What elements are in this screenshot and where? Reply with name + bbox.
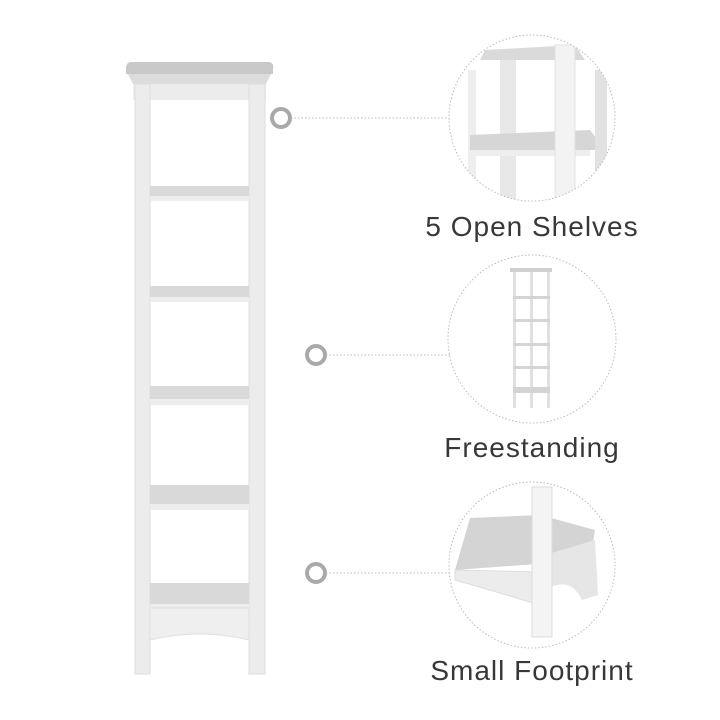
apron xyxy=(150,608,249,640)
detail circle: footprint xyxy=(449,482,615,648)
callout ring 1 xyxy=(272,109,449,127)
label: 5 open shelves: 5 Open Shelves xyxy=(425,211,639,242)
callout ring 2 xyxy=(307,346,450,364)
posts xyxy=(135,84,150,674)
bookshelf main xyxy=(126,62,273,674)
callout ring 3 xyxy=(307,564,450,582)
detail circle: freestanding xyxy=(448,255,616,423)
top cap xyxy=(126,62,273,74)
label: small footprint: Small Footprint xyxy=(430,655,634,686)
label: freestanding: Freestanding xyxy=(444,432,620,463)
shelves xyxy=(150,186,249,196)
detail circle: shelves xyxy=(449,35,615,215)
